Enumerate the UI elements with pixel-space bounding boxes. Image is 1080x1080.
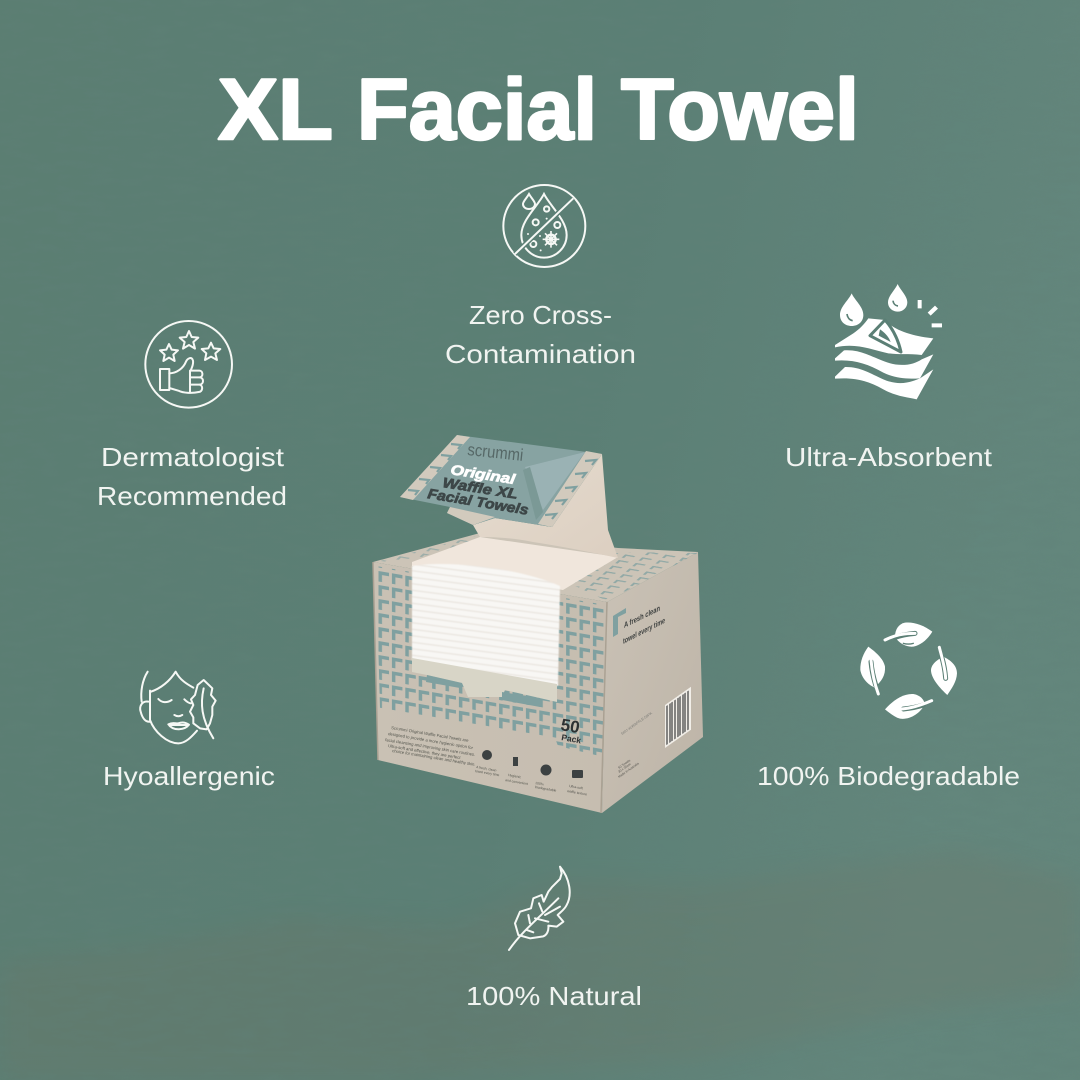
icon: four leaves in a cycle: [860, 622, 957, 719]
title: XL: [218, 62, 333, 158]
feature mini captions: waffle texture: [567, 789, 587, 796]
card heading: Facial Towels: [427, 485, 530, 518]
card border pattern right: [538, 451, 602, 527]
icon: crossed-out drop with germ: [503, 185, 585, 267]
title: [218, 62, 859, 158]
brand: scrummi: [467, 440, 524, 465]
label line 2: Contamination: [445, 339, 636, 369]
feature: 100% natural: [466, 867, 642, 1011]
card heading: Original: [450, 461, 518, 487]
feature mini captions: and convenient: [505, 778, 528, 786]
icon: thumbs up with stars: [145, 321, 232, 408]
card heading: Waffle XL: [442, 474, 519, 502]
pack count: 50: [559, 715, 581, 737]
feature mini captions: biodegradable: [535, 785, 557, 793]
tiny body copy: Ultra-soft and effective, they are perfect: [388, 743, 462, 760]
label: Dermatologist: [101, 442, 285, 472]
top face pattern: [567, 552, 698, 601]
feature: dermatologist recommended: [97, 321, 287, 511]
lid card: [400, 435, 602, 527]
card border pattern left: [400, 435, 470, 500]
side small print: SKU-XLWAFFLE-50PK: [620, 711, 653, 736]
slogan: [613, 603, 665, 646]
title: Towel: [621, 62, 859, 158]
card heading: [427, 461, 530, 518]
label line 2: Recommended: [97, 481, 287, 511]
label: Hyoallergenic: [103, 761, 275, 791]
label: 100% Natural: [466, 981, 642, 1011]
box front face: [373, 562, 607, 813]
feature mini captions: towel every time: [475, 769, 500, 777]
title: Facial: [357, 62, 597, 158]
feature: ultra-absorbent: [785, 284, 993, 472]
tiny body copy: designed to provide a more hygienic option for: [388, 731, 474, 750]
towel stack opening: [412, 564, 560, 686]
feature: hypoallergenic: [103, 672, 275, 791]
card bottom tab: [447, 507, 495, 525]
card facet shading: [525, 452, 585, 510]
barcode: [665, 687, 691, 748]
product: scrummi towel box: [373, 435, 703, 813]
pack count: Pack: [561, 732, 582, 745]
box right face: [602, 552, 703, 813]
towels top surface: [412, 537, 618, 590]
waffle gamma pattern: [376, 566, 606, 757]
icon: drops on layered towels: [835, 284, 942, 399]
opening tray lip: [412, 658, 557, 702]
icon: outlined leaf: [509, 867, 570, 950]
tray tabs: [426, 675, 540, 707]
peel-back flap underside: [473, 454, 618, 558]
feature mini captions: Hygienic: [508, 773, 522, 779]
top left pattern strip: [376, 536, 480, 562]
pack count: [559, 715, 582, 745]
label: Ultra-Absorbent: [785, 442, 993, 472]
slogan: A fresh clean: [624, 603, 660, 630]
feature mini captions: Ultra-soft: [569, 784, 583, 790]
tiny body copy: Scrummi Original Waffle Facial Towels are: [391, 725, 470, 743]
label: Zero Cross-: [469, 300, 612, 330]
tiny body copy: [385, 725, 476, 767]
feature: 100% biodegradable: [757, 622, 1020, 791]
side spec lines: 30 x 30cm: [617, 762, 632, 774]
label: 100% Biodegradable: [757, 761, 1020, 791]
tiny body copy: choice for maintaining clean and healthy skin.: [392, 748, 476, 767]
icon: face with leaf: [140, 672, 216, 743]
slogan: towel every time: [623, 615, 665, 646]
feature mini captions: [475, 765, 587, 796]
feature: zero cross-contamination: [445, 185, 636, 369]
side seam: [373, 562, 607, 813]
side spec lines: 50 Towels: [617, 758, 631, 770]
side spec lines: Made in Australia: [617, 761, 640, 779]
feature mini captions: 100%: [535, 781, 544, 786]
box top face: [373, 533, 698, 602]
feature mini icons: [482, 750, 583, 778]
feature mini captions: A fresh, clean: [476, 765, 497, 773]
tiny body copy: facial cleansing and improving skin care routines.: [385, 737, 476, 757]
